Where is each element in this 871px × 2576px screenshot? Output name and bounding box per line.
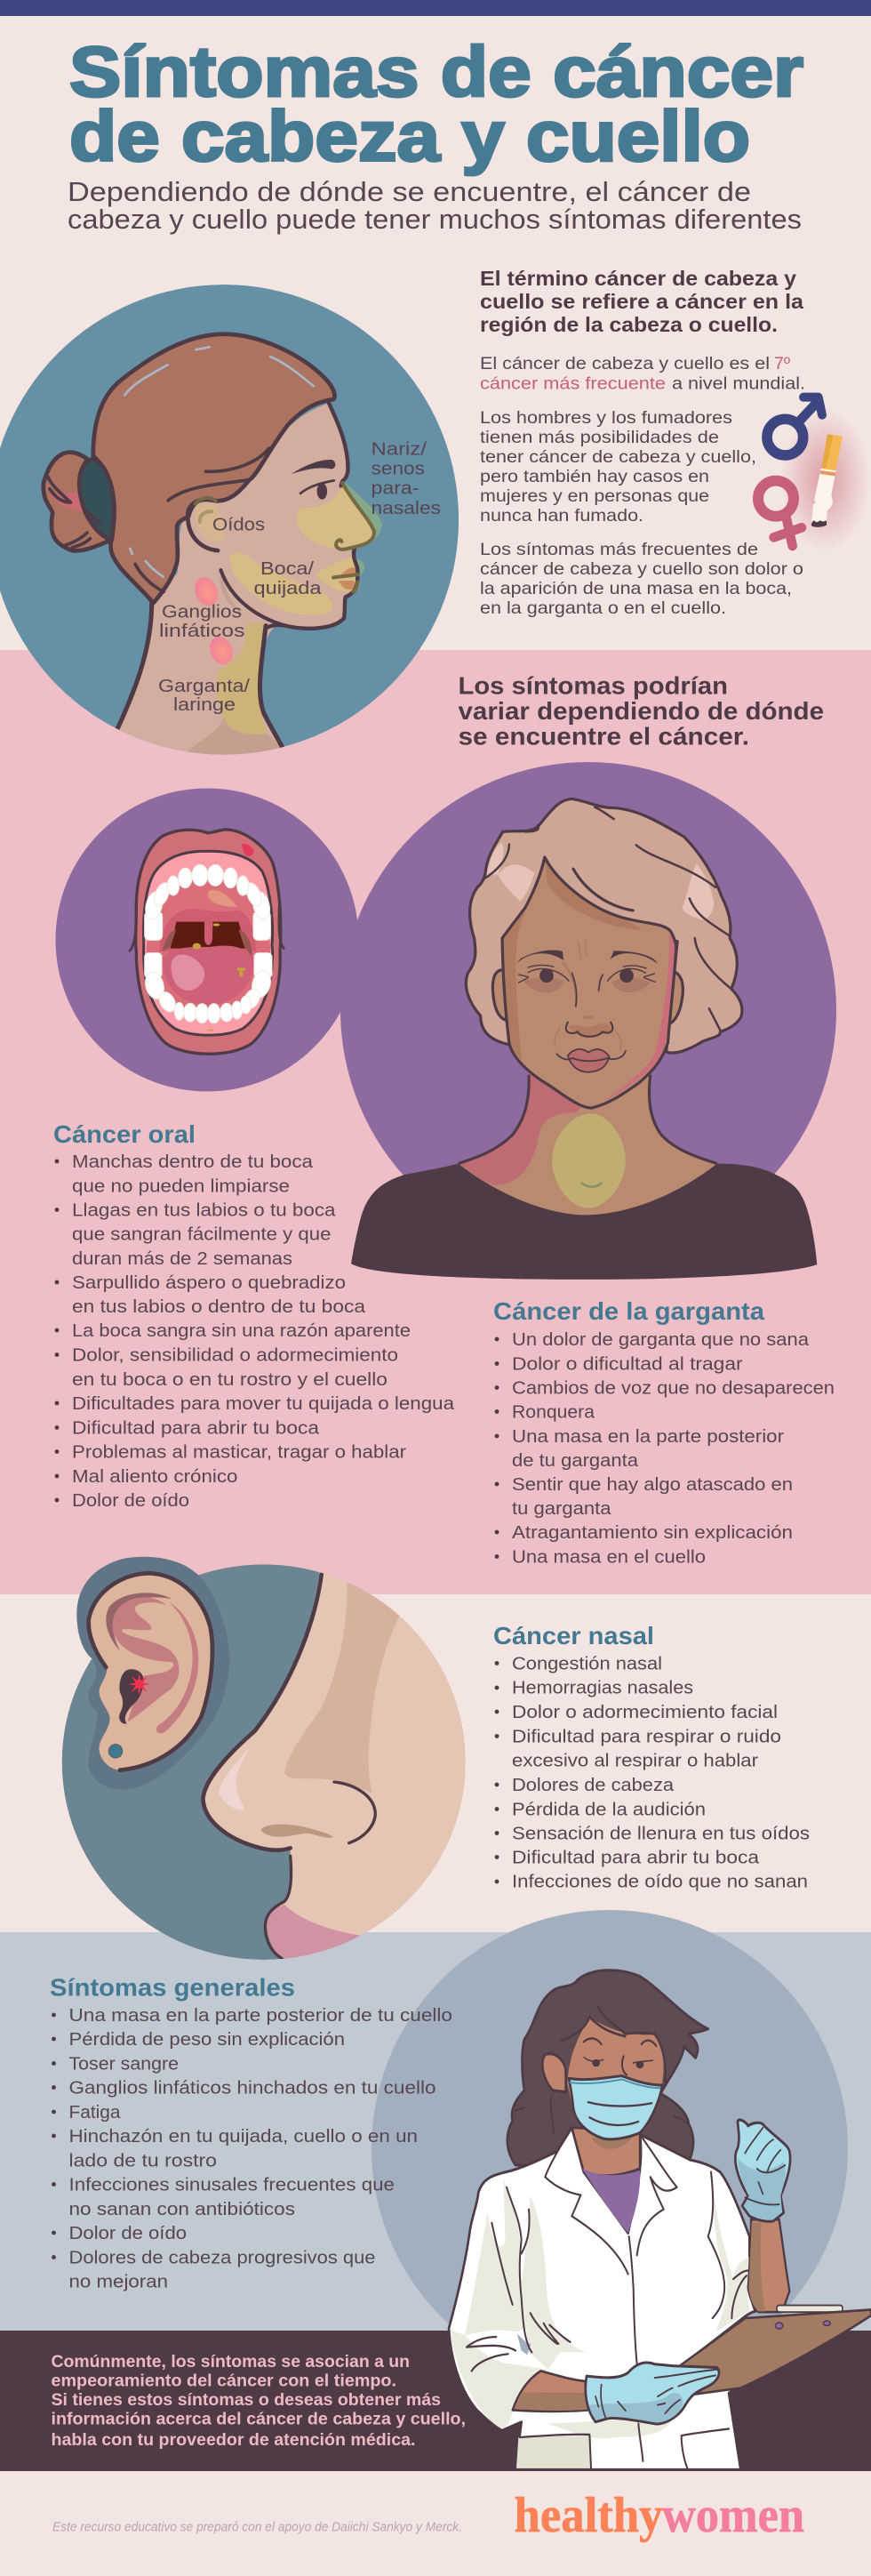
section: throat cancer: Dolor o dificultad al tragar [512, 1353, 743, 1374]
intro paragraph 2: tener cáncer de cabeza y cuello, [480, 447, 756, 467]
arm right [748, 2219, 789, 2312]
intro heading: cuello se refiere a cáncer en la [480, 290, 803, 313]
tongue patch [172, 955, 204, 991]
callout text: empeoramiento del cáncer con el tiempo. [52, 2371, 396, 2390]
ear halo [76, 1557, 229, 1790]
eyes and brows [584, 2038, 656, 2074]
section: oral cancer: que no pueden limpiarse [72, 1176, 290, 1196]
ear [542, 2054, 566, 2092]
icons: gender symbols and cigarette [758, 397, 869, 551]
section: nasal cancer: Sensación de llenura en tus oídos [512, 1823, 810, 1843]
intro heading: El término cáncer de cabeza y [480, 267, 796, 290]
neck [571, 2128, 640, 2176]
logo: healthywomen [514, 2488, 804, 2543]
heading: symptoms vary [459, 672, 824, 750]
icon: male symbol [767, 397, 822, 455]
line work [48, 404, 357, 748]
nose and mouth overflow highlight [345, 482, 382, 590]
section: general symptoms: Una masa en la parte posterior de tu cuello [69, 2005, 452, 2026]
lips [556, 1049, 626, 1072]
section: throat cancer: de tu garganta [512, 1450, 639, 1471]
background circle [0, 285, 459, 755]
section: nasal cancer: Cáncer nasal [493, 1622, 654, 1649]
section: throat cancer: Una masa en el cuello [512, 1547, 706, 1567]
purple shirt [582, 2169, 640, 2233]
section: general symptoms: no mejoran [69, 2272, 168, 2292]
top bar [0, 0, 871, 16]
earring [108, 1745, 123, 1758]
throat [171, 922, 246, 949]
lip sore [242, 844, 254, 856]
neck and chest [459, 1073, 717, 1215]
ear canal [119, 1669, 143, 1724]
teal circle [62, 1564, 466, 1960]
face outline [502, 857, 676, 1108]
hair highlights [124, 347, 314, 577]
section: oral cancer: Dolor, sensibilidad o adormecimiento [72, 1345, 398, 1366]
face shadow [502, 859, 643, 1059]
section: nasal cancer: excesivo al respirar o hablar [512, 1751, 758, 1771]
hair highlights [487, 843, 714, 919]
mask folds [588, 2102, 651, 2125]
section: oral cancer [53, 1120, 455, 1511]
illustration: woman portrait [351, 799, 817, 1280]
callout text: información acerca del cáncer de cabeza y cuello, [52, 2410, 466, 2429]
pink band [0, 650, 871, 1594]
illustration: doctor [449, 1970, 871, 2469]
intro paragraph 1: El cáncer de cabeza y cuello es el [480, 354, 770, 373]
logo: healthywomen: healthy [514, 2488, 663, 2543]
section: oral cancer: Cáncer oral [53, 1120, 196, 1148]
intro paragraph 2: nunca han fumado. [480, 506, 643, 526]
skin [118, 404, 352, 754]
hair [507, 1970, 708, 2172]
section: general symptoms [50, 1974, 452, 2292]
section: oral cancer: Dificultades para mover tu quijada o lengua [72, 1393, 455, 1414]
ear shadow [106, 1593, 172, 1651]
throat bullets [495, 1337, 499, 1559]
section: oral cancer: Llagas en tus labios o tu boca [72, 1200, 336, 1220]
glove lines [595, 2369, 718, 2419]
subtitle: Dependiendo de dónde se encuentre, el cáncer de [68, 176, 751, 207]
section: oral cancer: Dolor de oído [72, 1490, 189, 1511]
section: throat cancer: tu garganta [512, 1498, 611, 1519]
title [69, 32, 803, 176]
section: throat cancer: Una masa en la parte posterior [512, 1426, 784, 1447]
section: general symptoms: Toser sangre [69, 2053, 179, 2074]
brows [516, 951, 658, 964]
soft palate [159, 909, 256, 951]
mask band [570, 2079, 660, 2088]
fringe lines [562, 2007, 666, 2082]
pain star [128, 1673, 150, 1696]
arm left [513, 2371, 588, 2411]
section: throat cancer: Un dolor de garganta que no sana [512, 1329, 810, 1350]
intro paragraph 1: cáncer más frecuente [480, 373, 666, 393]
support note: Este recurso educativo se preparó con el apoyo de Daiichi Sankyo y Merck. [52, 2520, 462, 2534]
throat sides [163, 929, 252, 958]
intro paragraph 2 [480, 408, 756, 526]
intro paragraph 2: mujeres y en personas que [480, 486, 709, 506]
nasal bullets [495, 1661, 499, 1883]
section: oral cancer: en tu boca o en tu rostro y el cuello [72, 1369, 388, 1390]
dark callout band [0, 2331, 871, 2471]
nose outline [203, 1575, 375, 1959]
nose [555, 940, 621, 1049]
head labels [158, 439, 441, 715]
intro paragraph 1: a nivel mundial. [672, 373, 805, 393]
coat [449, 2128, 755, 2469]
intro paragraph 3: la aparición de una masa en la boca, [480, 579, 792, 598]
intro paragraph 3: en la garganta o en el cuello. [480, 598, 726, 618]
intro heading: región de la cabeza o cuello. [480, 313, 778, 336]
subtitle: cabeza y cuello puede tener muchos síntomas diferentes [68, 204, 802, 235]
callout text: Si tienes estos síntomas o deseas obtener más [52, 2390, 441, 2410]
nostril [260, 1825, 333, 1838]
bun band [46, 486, 83, 511]
overlay: jaw [229, 553, 332, 615]
tongue [163, 946, 254, 1005]
palate patch [208, 890, 237, 907]
section: throat cancer: Cáncer de la garganta [493, 1297, 764, 1325]
coat shading [451, 2172, 749, 2468]
arm right shadow [748, 2223, 766, 2311]
head labels: quijada [254, 579, 323, 598]
mask [569, 2076, 662, 2139]
face [502, 857, 676, 1108]
overlay: throat [216, 622, 268, 734]
section: oral cancer: Manchas dentro de tu boca [72, 1152, 314, 1172]
intro paragraph 3: Los síntomas más frecuentes de [480, 540, 758, 559]
pink cheek edge [603, 935, 675, 1102]
nose and ear outline [196, 483, 374, 591]
palate [147, 874, 270, 1014]
section: general symptoms: Pérdida de peso sin explicación [69, 2029, 345, 2050]
head labels: laringe [173, 695, 236, 715]
eye and brow [292, 460, 335, 500]
section: nasal cancer: Dolor o adormecimiento facial [512, 1702, 778, 1722]
head labels: nasales [372, 499, 441, 518]
section: throat cancer: Cambios de voz que no desaparecen [512, 1378, 835, 1398]
eye bags [523, 977, 651, 993]
head labels: Boca/ [260, 559, 315, 579]
blue-grey band [0, 1932, 871, 2331]
glow [780, 409, 869, 551]
coat gap [517, 2333, 531, 2355]
ear outline [89, 1573, 212, 1770]
section: nasal cancer: Pérdida de la audición [512, 1799, 706, 1819]
clipboard [668, 2310, 871, 2396]
intro heading [480, 267, 803, 336]
intro paragraph 2: tienen más posibilidades de [480, 428, 719, 447]
section: oral cancer: duran más de 2 semanas [72, 1248, 292, 1269]
glove upper shade [738, 2158, 786, 2219]
section: general symptoms: Dolores de cabeza progresivos que [69, 2247, 375, 2267]
intro paragraph 1 [480, 354, 805, 393]
clip [777, 2306, 843, 2312]
ears [492, 970, 683, 1023]
lips [136, 830, 281, 1054]
lymph nodes [195, 577, 233, 665]
callout text [52, 2352, 466, 2450]
lip [267, 1905, 361, 1959]
section: oral cancer: Mal aliento crónico [72, 1466, 238, 1487]
neck shadow [591, 2136, 634, 2149]
general bullets [52, 2013, 56, 2259]
title: Síntomas de cáncer [69, 32, 803, 111]
head labels: Garganta/ [158, 677, 251, 696]
section: throat cancer: Ronquera [512, 1402, 595, 1423]
hair [466, 799, 742, 1053]
scrunchie [79, 459, 114, 540]
ear interior [112, 1597, 179, 1722]
section: general symptoms: Hinchazón en tu quijada, cuello o en un [69, 2126, 418, 2147]
section: nasal cancer: Hemorragias nasales [512, 1678, 693, 1698]
section: oral cancer: Problemas al masticar, tragar o hablar [72, 1442, 406, 1463]
section: nasal cancer: Dificultad para abrir tu boca [512, 1847, 760, 1867]
face [567, 2017, 664, 2138]
section: general symptoms: Ganglios linfáticos hinchados en tu cuello [69, 2077, 436, 2099]
ear helix [156, 1602, 198, 1733]
section: nasal cancer: Congestión nasal [512, 1653, 662, 1673]
section: nasal cancer: Infecciones de oído que no sanan [512, 1872, 808, 1892]
purple circle: mouth [55, 788, 359, 1092]
hair strands [483, 807, 731, 1031]
section: general symptoms: Infecciones sinusales frecuentes que [69, 2175, 395, 2195]
glove upper [735, 2120, 790, 2221]
lesions [193, 923, 245, 1031]
intro paragraph 1: 7º [774, 354, 790, 373]
head labels: Ganglios [162, 603, 242, 622]
overlay: nose and sinuses [297, 487, 372, 549]
inner mouth [144, 851, 273, 1035]
icon: cigarette [811, 434, 843, 527]
coat lines [467, 2128, 748, 2468]
heading: symptoms vary: Los síntomas podrían [459, 672, 728, 699]
glove lower shade [589, 2393, 683, 2422]
pink neck area [459, 1073, 582, 1185]
illustration: ear and nose [62, 1556, 498, 1962]
intro paragraph 3: cáncer de cabeza y cuello son dolor o [480, 559, 803, 579]
section: throat cancer: Sentir que hay algo atascado en [512, 1474, 793, 1495]
hair main [93, 334, 334, 603]
heading: symptoms vary: se encuentre el cáncer. [459, 722, 749, 750]
mouth corners [130, 907, 284, 951]
section: oral cancer: que sangran fácilmente y que [72, 1224, 331, 1245]
head labels: Nariz/ [372, 439, 428, 459]
oral bullets [55, 1160, 59, 1502]
section: oral cancer: en tus labios o dentro de tu boca [72, 1296, 366, 1317]
intro paragraph 2: Los hombres y los fumadores [480, 408, 732, 428]
hair bun [44, 453, 112, 550]
face skin [204, 1572, 466, 1959]
jaw shadow [220, 573, 244, 617]
upper teeth [143, 864, 273, 940]
heading: symptoms vary: variar dependiendo de dónde [459, 697, 824, 725]
adams apple [582, 1184, 601, 1187]
callout text: habla con tu proveedor de atención médica. [52, 2430, 416, 2450]
head labels: Oídos [212, 516, 265, 535]
section: nasal cancer: Dolores de cabeza [512, 1775, 675, 1795]
purple circle: woman [340, 762, 836, 1258]
glove upper lines [745, 2128, 785, 2204]
chest shadow [185, 718, 283, 757]
arm left shadow [515, 2392, 588, 2411]
glove lower [586, 2363, 719, 2424]
lower teeth [142, 953, 274, 1023]
subtitle [68, 176, 802, 235]
section: throat cancer [493, 1297, 835, 1567]
panel: head profile illustration [0, 285, 459, 757]
intro paragraph 3 [480, 540, 803, 618]
hair strands [515, 2097, 689, 2133]
title: de cabeza y cuello [69, 96, 750, 176]
section: general symptoms: Síntomas generales [50, 1974, 295, 2001]
head labels: linfáticos [159, 622, 245, 641]
section: oral cancer: Sarpullido áspero o quebradizo [72, 1272, 346, 1293]
head labels: senos [372, 459, 425, 478]
section: general symptoms: Fatiga [69, 2102, 121, 2123]
ear overlay [196, 503, 225, 542]
shirt [351, 1164, 817, 1280]
throat mass [552, 1113, 626, 1208]
doctor circle [372, 1910, 848, 2387]
section: nasal cancer [493, 1622, 810, 1892]
section: oral cancer: Dificultad para abrir tu boca [72, 1417, 320, 1439]
nose highlight [219, 1747, 251, 1810]
head labels: para- [372, 478, 420, 498]
illustration: open mouth [130, 830, 284, 1054]
overlay: lips [316, 557, 357, 592]
ear [89, 1573, 212, 1770]
logo: healthywomen: women [662, 2488, 804, 2543]
section: general symptoms: Dolor de oído [69, 2223, 187, 2243]
section: throat cancer: Atragantamiento sin explicación [512, 1522, 793, 1543]
cheek shade [284, 1574, 403, 1794]
section: nasal cancer: Dificultad para respirar o ruido [512, 1726, 781, 1746]
clipboard holes [775, 2321, 830, 2329]
icon: female symbol [758, 481, 802, 546]
lips [339, 567, 356, 590]
section: general symptoms: no sanan con antibióticos [69, 2199, 295, 2219]
section: general symptoms: lado de tu rostro [69, 2150, 217, 2171]
callout text: Comúnmente, los síntomas se asocian a un [52, 2352, 410, 2371]
eyes [519, 965, 655, 983]
neck outline [459, 1075, 717, 1164]
intro paragraph 2: pero también hay casos en [480, 467, 709, 486]
section: oral cancer: La boca sangra sin una razón aparente [72, 1320, 411, 1341]
